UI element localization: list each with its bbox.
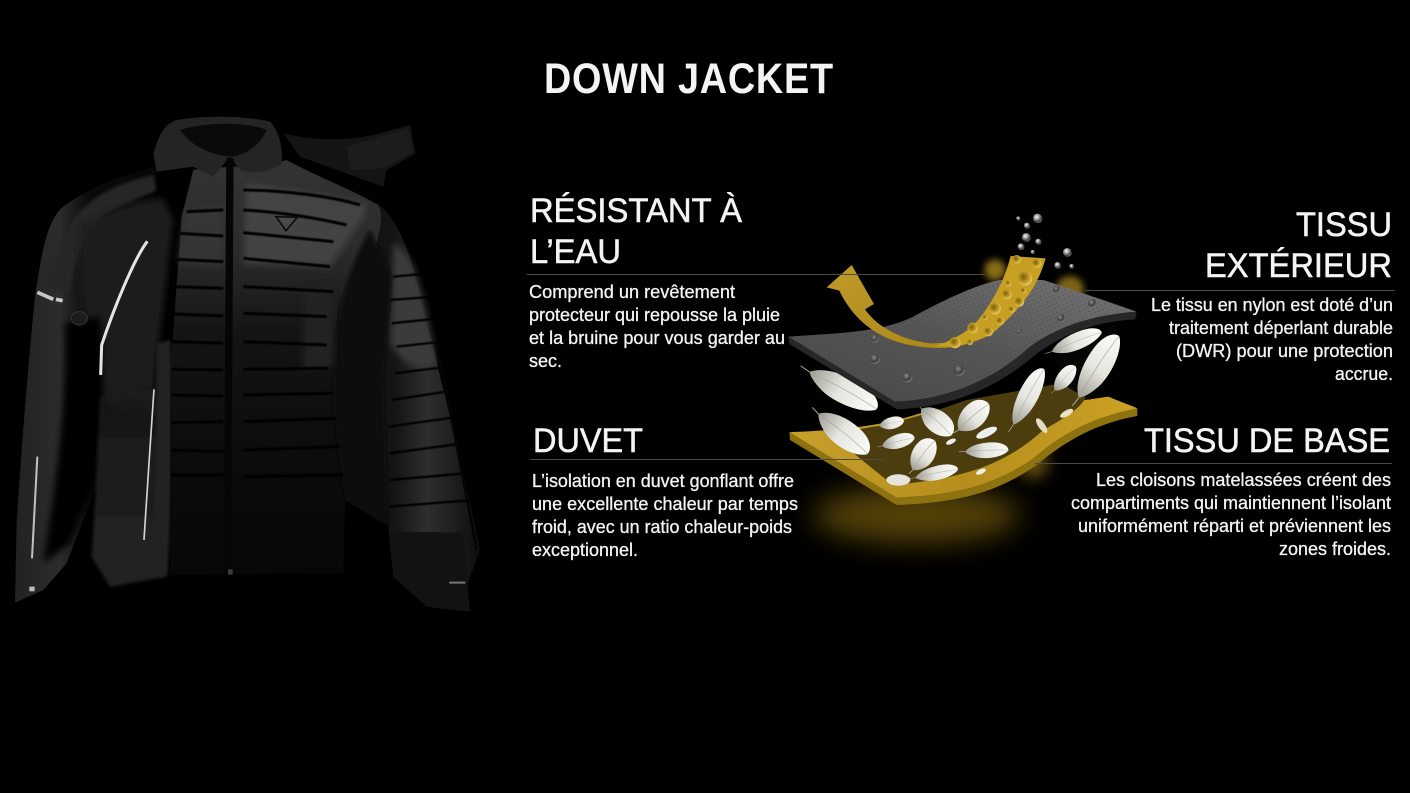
- text block: résistant à l'eau: [529, 282, 785, 371]
- title: DOWN JACKET: [544, 54, 836, 103]
- left underarm shadow: [43, 317, 103, 563]
- text block: duvet: [532, 471, 798, 560]
- heading: résistant à l'eau: RÉSISTANT À: [530, 192, 742, 230]
- glow spots: [984, 259, 1084, 478]
- text block: tissu de base: [1071, 470, 1391, 559]
- text block: duvet: froid, avec un ratio chaleur-poids: [532, 517, 792, 537]
- text block: tissu extérieur: accrue.: [1335, 364, 1393, 384]
- text block: résistant à l'eau: sec.: [529, 351, 562, 371]
- water beads on fabric: [870, 286, 1097, 382]
- body side panel shadow: [333, 230, 392, 527]
- cuff label: [449, 582, 465, 584]
- chest logo: [276, 217, 297, 231]
- puffer baffles: [172, 190, 360, 477]
- heading: résistant à l'eau: L’EAU: [530, 233, 621, 271]
- hood flap: [283, 125, 416, 187]
- reflective strip: chest flap: [101, 241, 147, 375]
- heading: tissu de base: TISSU DE BASE: [1144, 422, 1390, 460]
- text block: résistant à l'eau: protecteur qui repousse la pluie: [529, 305, 780, 325]
- waist highlight: [303, 283, 333, 370]
- text block: tissu extérieur: traitement déperlant durable: [1169, 318, 1393, 338]
- gold strip droplets: [949, 255, 1041, 348]
- text block: duvet: exceptionnel.: [532, 540, 638, 560]
- heading: tissu extérieur: TISSU: [1296, 206, 1392, 244]
- heading: tissu extérieur: EXTÉRIEUR: [1205, 247, 1392, 285]
- left shell shoulder highlight: [47, 175, 157, 293]
- collar: [153, 117, 282, 177]
- text block: résistant à l'eau: et la bruine pour vous garder au: [529, 328, 785, 348]
- feathers: [794, 323, 1129, 486]
- inner puffer body: [170, 160, 381, 575]
- hem zip pull: [228, 569, 233, 575]
- chest highlight: [243, 183, 367, 267]
- right sleeve seam: [437, 343, 477, 550]
- base layer: [789, 380, 1137, 505]
- flap edge highlight: [152, 340, 173, 575]
- text block: tissu extérieur: Le tissu en nylon est doté d’un: [1151, 295, 1393, 315]
- diagram: fabric layers: [788, 214, 1137, 543]
- arm button: [71, 312, 87, 325]
- reflective strip: cuff: [32, 457, 37, 558]
- left chest panel: [80, 198, 173, 443]
- outer fabric layer: [788, 280, 1137, 409]
- text block: duvet: une excellente chaleur par temps: [532, 494, 798, 514]
- text block: tissu de base: compartiments qui maintiennent l’isolant: [1071, 493, 1391, 513]
- left sleeve and shell: [15, 167, 157, 603]
- text block: tissu de base: Les cloisons matelassées créent des: [1096, 470, 1391, 490]
- text block: tissu extérieur: (DWR) pour une protection: [1176, 341, 1393, 361]
- left front flap: [92, 343, 173, 587]
- text block: duvet: L’isolation en duvet gonflant offre: [532, 471, 794, 491]
- text block: tissu de base: uniformément réparti et préviennent les: [1078, 516, 1391, 536]
- water droplets above: [1016, 214, 1074, 269]
- heading: tissu extérieur: [1205, 206, 1392, 285]
- reflective strip: arm: [37, 292, 63, 301]
- text block: tissu extérieur: [1151, 295, 1393, 384]
- text block: tissu de base: zones froides.: [1279, 539, 1391, 559]
- right sleeve baffles: [388, 273, 473, 507]
- arrow: moisture vapour escaping: [827, 256, 1046, 348]
- gold glow under base layer: [813, 487, 1020, 543]
- reflective strip: lower flap: [144, 389, 154, 540]
- right sleeve: [340, 203, 480, 612]
- center zipper: [227, 158, 230, 574]
- heading: duvet: DUVET: [533, 422, 643, 460]
- illustration: open down jacket: [15, 117, 480, 612]
- heading: résistant à l'eau: [530, 192, 742, 271]
- left chest highlight: [177, 207, 223, 267]
- text block: résistant à l'eau: Comprend un revêtement: [529, 282, 735, 302]
- right sleeve highlight: [390, 243, 437, 368]
